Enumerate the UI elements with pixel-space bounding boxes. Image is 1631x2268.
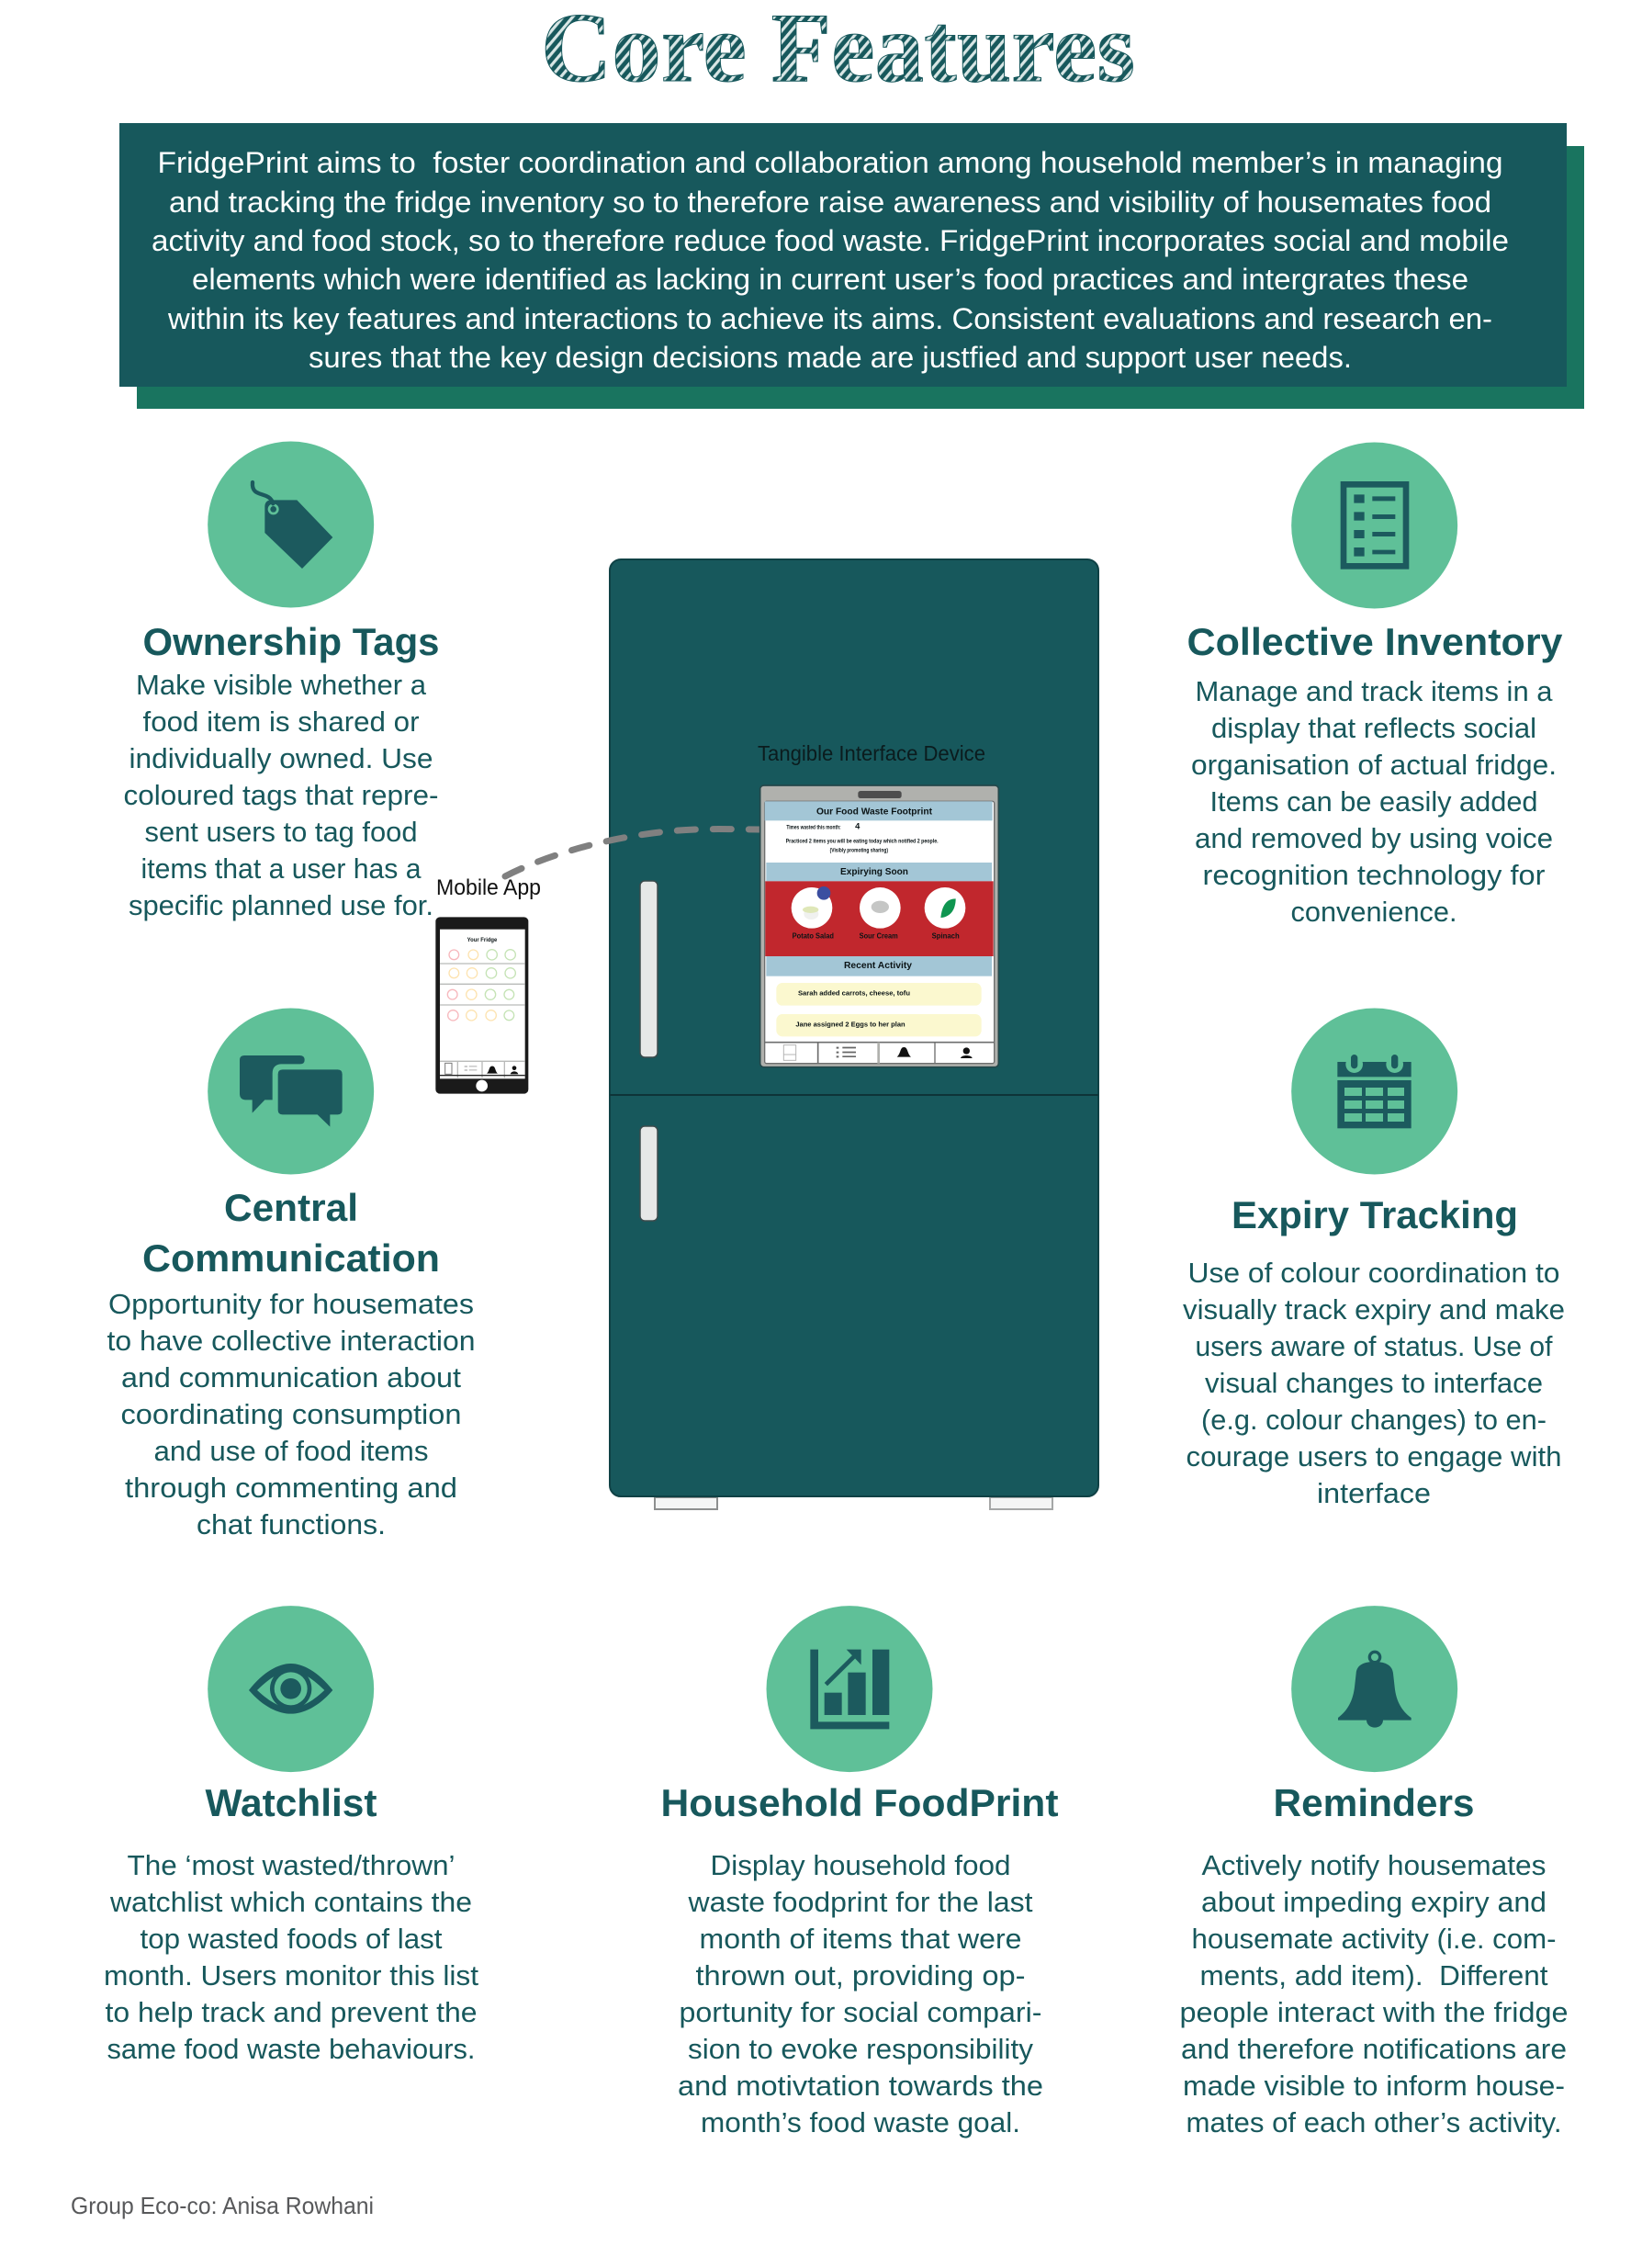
text: household foodprint description: month of items that were [700, 1923, 1021, 1955]
arrow: dashed connector from mobile app to device [505, 829, 759, 876]
text: ownership tags description: individually owned. Use [129, 742, 433, 774]
text: central communication description: and communication about [121, 1361, 461, 1394]
text: collective inventory description: Items can be easily added [1210, 785, 1537, 818]
phone home button [476, 1080, 488, 1091]
tablet recent activity section: Jane assigned 2 Eggs to her plan [795, 1021, 905, 1029]
heading: household foodprint: Household FoodPrint [661, 1781, 1059, 1824]
icon: speech bubbles [208, 1008, 374, 1174]
text: collective inventory description: Manage and track items in a [1196, 675, 1553, 707]
tablet expiring soon section: Sour Cream [860, 932, 898, 941]
text: ownership tags description: items that a user has a [141, 852, 422, 885]
fridge body [610, 559, 1098, 1496]
text: household foodprint description: sion to evoke responsibility [688, 2033, 1033, 2065]
text: expiry tracking description: (e.g. colour changes) to en- [1201, 1404, 1547, 1436]
text: watchlist description: month. Users monitor this list [104, 1959, 478, 1992]
heading: central communication [142, 1186, 440, 1280]
text: watchlist description: top wasted foods of last [140, 1923, 443, 1955]
icon: price tag [208, 441, 374, 607]
text: watchlist description: The ‘most wasted/thrown’ [127, 1849, 456, 1881]
heading: collective inventory: Collective Inventory [1187, 620, 1563, 663]
text: expiry tracking description: courage users to engage with [1187, 1440, 1561, 1473]
icon: eye [208, 1606, 374, 1772]
phone food status circles [447, 950, 515, 1021]
tablet navigation bar [765, 1043, 995, 1064]
icon: rising bar chart [766, 1606, 932, 1772]
text: reminders description: about impeding expiry and [1201, 1886, 1547, 1918]
text: collective inventory description: convenience. [1291, 896, 1457, 928]
text: central communication description: chat functions. [197, 1508, 386, 1540]
text: expiry tracking description: users aware of status. Use of [1196, 1330, 1553, 1362]
fridge bottom handle [640, 1126, 658, 1221]
text: ownership tags description: Make visible whether a [136, 669, 427, 701]
text: reminders description: and therefore notifications are [1181, 2033, 1567, 2065]
mobile phone [435, 917, 528, 1094]
panel: collective inventory [1187, 442, 1563, 928]
text: household foodprint description: portunity for social compari- [680, 1996, 1041, 2028]
text: central communication description: coordinating consumption [121, 1398, 461, 1430]
panel: reminders [1179, 1606, 1569, 2138]
text: watchlist description: same food waste behaviours. [107, 2033, 476, 2065]
text: central communication description: through commenting and [125, 1472, 457, 1504]
icon: calendar [1291, 1008, 1457, 1174]
text: expiry tracking description: Use of colour coordination to [1188, 1257, 1559, 1289]
fridge illustration [610, 559, 1098, 1509]
text: watchlist description: watchlist which contains the [109, 1886, 472, 1918]
text: ownership tags description: sent users to tag food [145, 816, 417, 848]
panel: expiry tracking [1183, 1008, 1565, 1509]
text: household foodprint description [678, 1849, 1043, 2138]
footer credit: Group Eco-co: Anisa Rowhani [71, 2192, 374, 2219]
text: central communication description: Opportunity for housemates [108, 1288, 474, 1320]
panel: watchlist [104, 1606, 478, 2065]
text: collective inventory description: recognition technology for [1203, 859, 1545, 891]
tablet footprint section: Times wasted this month: [786, 826, 841, 831]
text: expiry tracking description: visual changes to interface [1205, 1367, 1543, 1399]
label: mobile app: Mobile App [436, 875, 541, 900]
fridge feet [655, 1497, 1052, 1509]
text: introduction paragraph: within its key features and interactions to achieve its aims. Consistent evaluations and research en- [167, 302, 1492, 335]
text: household foodprint description: month’s food waste goal. [701, 2106, 1020, 2138]
panel: ownership tags [123, 441, 439, 921]
tablet footprint section: 4 [855, 822, 860, 831]
heading: watchlist: Watchlist [206, 1781, 377, 1824]
text: reminders description: people interact with the fridge [1179, 1996, 1569, 2028]
text: reminders description: mates of each other’s activity. [1187, 2106, 1561, 2138]
text: reminders description: made visible to inform house- [1183, 2070, 1565, 2102]
text: collective inventory description: display that reflects social [1211, 712, 1536, 744]
tablet expiring soon section: Spinach [932, 932, 960, 941]
text: reminders description: Actively notify housemates [1201, 1849, 1547, 1881]
fridge top handle [640, 881, 658, 1057]
text: expiry tracking description [1183, 1257, 1565, 1509]
tablet expiring soon section: Expirying Soon [840, 867, 908, 877]
tablet footprint section: Our Food Waste Footprint [816, 807, 933, 818]
text: introduction paragraph: elements which were identified as lacking in current user’s food practices and intergrates these [192, 263, 1468, 296]
tablet footprint section: (Visibly promoting sharing) [830, 849, 888, 854]
heading: central communication: Central [224, 1186, 358, 1229]
text: ownership tags description [123, 669, 439, 921]
text: reminders description [1179, 1849, 1569, 2138]
tablet recent activity section: Sarah added carrots, cheese, tofu [798, 989, 910, 998]
text: household foodprint description: waste foodprint for the last [687, 1886, 1033, 1918]
icon: bell [1291, 1606, 1457, 1772]
text: collective inventory description: and removed by using voice [1195, 822, 1553, 854]
text: reminders description: housemate activity (i.e. com- [1192, 1923, 1556, 1955]
icon: inventory list [1291, 442, 1457, 608]
text: introduction paragraph [152, 146, 1509, 374]
heading: central communication: Communication [142, 1236, 440, 1280]
tablet recent activity section [766, 956, 992, 1036]
text: introduction paragraph: FridgePrint aims to foster coordination and collaboration among household member’s in managing [158, 146, 1502, 179]
heading: ownership tags: Ownership Tags [143, 620, 439, 663]
label: tangible interface device: Tangible Interface Device [758, 741, 985, 765]
mobile phone: Your Fridge [467, 937, 498, 943]
heading: reminders: Reminders [1273, 1781, 1475, 1824]
text: watchlist description [104, 1849, 478, 2065]
tablet footprint section [765, 801, 993, 854]
tablet expiring soon section [765, 863, 994, 956]
text: expiry tracking description: interface [1317, 1477, 1431, 1509]
text: central communication description: to have collective interaction [107, 1325, 476, 1357]
text: household foodprint description: and motivtation towards the [678, 2070, 1043, 2102]
tablet device [760, 785, 998, 1067]
text: ownership tags description: specific planned use for. [129, 889, 433, 921]
panel: introduction [119, 123, 1584, 409]
text: central communication description [107, 1288, 476, 1540]
text: introduction paragraph: activity and food stock, so to therefore reduce food waste. FridgePrint incorporates social and mobile [152, 224, 1509, 257]
text: ownership tags description: food item is shared or [143, 705, 419, 738]
panel: household foodprint [661, 1606, 1059, 2138]
text: collective inventory description: organisation of actual fridge. [1191, 749, 1557, 781]
text: introduction paragraph: sures that the key design decisions made are justfied and support user needs. [309, 341, 1352, 374]
tablet recent activity section: Recent Activity [844, 961, 913, 971]
text: introduction paragraph: and tracking the fridge inventory so to therefore raise awareness and visibility of housemates food [169, 186, 1491, 219]
tablet expiring soon section: Potato Salad [793, 932, 834, 941]
tablet footprint section: Practiced 2 items you will be eating today which notified 2 people. [786, 840, 939, 845]
text: household foodprint description: thrown out, providing op- [696, 1959, 1025, 1992]
text: reminders description: ments, add item). Different [1199, 1959, 1548, 1992]
text: central communication description: and use of food items [154, 1435, 428, 1467]
heading: expiry tracking: Expiry Tracking [1232, 1193, 1518, 1236]
text: ownership tags description: coloured tags that repre- [123, 779, 439, 811]
text: household foodprint description: Display household food [711, 1849, 1010, 1881]
text: collective inventory description [1191, 675, 1557, 928]
text: expiry tracking description: visually track expiry and make [1183, 1293, 1565, 1326]
panel: central communication [107, 1008, 476, 1540]
phone navigation icons [440, 1063, 525, 1076]
text: watchlist description: to help track and prevent the [105, 1996, 478, 2028]
